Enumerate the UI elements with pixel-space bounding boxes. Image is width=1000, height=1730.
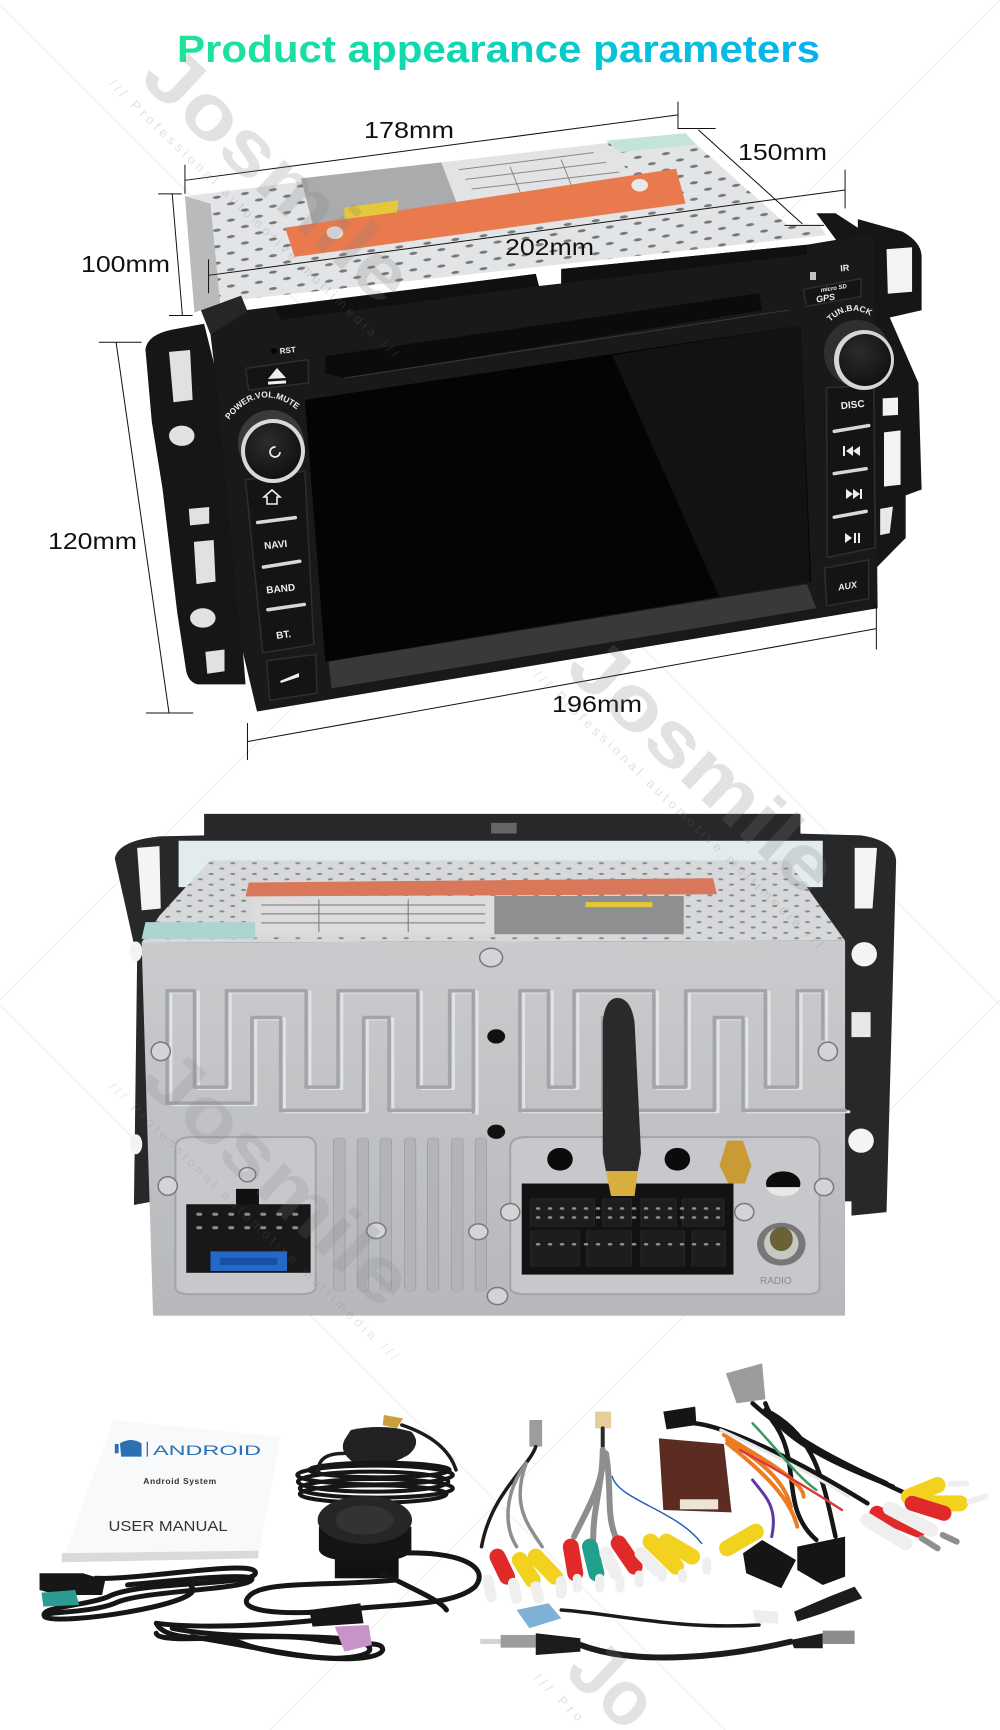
front panel labels: BT. bbox=[275, 629, 292, 642]
GPS gold connector bbox=[719, 1141, 751, 1184]
front panel labels: micro SD bbox=[820, 284, 848, 294]
left knob bbox=[238, 410, 305, 483]
watermark 2: Josmile bbox=[551, 619, 856, 912]
dimension: 150mm: 150mm bbox=[738, 139, 827, 165]
RCA plugs right bbox=[867, 1483, 985, 1548]
front panel labels: IR bbox=[840, 263, 850, 273]
watermark 1: Josmile bbox=[126, 28, 431, 321]
dimension: 202mm bbox=[209, 170, 845, 293]
front panel labels: TUN.BACK bbox=[826, 305, 873, 320]
dimension: 178mm: 178mm bbox=[364, 117, 454, 143]
pink connector bbox=[309, 1603, 372, 1652]
GPS antenna bbox=[297, 1415, 456, 1503]
manual text bbox=[108, 1442, 261, 1535]
RCA harness left bbox=[482, 1412, 756, 1598]
dimension: 120mm bbox=[48, 342, 193, 713]
holes bbox=[487, 1029, 800, 1196]
dimension: 100mm bbox=[81, 194, 193, 316]
control buttons bbox=[246, 279, 875, 700]
manual text: Android System bbox=[143, 1476, 217, 1486]
teal connector bbox=[40, 1573, 105, 1607]
front panel labels: NAVI bbox=[264, 539, 288, 552]
dimension: 196mm bbox=[247, 605, 876, 760]
chassis top plate bbox=[185, 133, 826, 313]
watermark 2: /// Professional automotive multimedia /// bbox=[531, 667, 827, 952]
WiFi antenna bbox=[603, 998, 641, 1196]
rear chassis top bbox=[142, 841, 845, 942]
product: rear view bbox=[115, 814, 896, 1316]
round socket bbox=[757, 1223, 806, 1266]
lower panels bbox=[175, 1137, 820, 1294]
manual text: USER MANUAL bbox=[108, 1518, 228, 1535]
watermark 3: /// Professional automotive multimedia /// bbox=[106, 1079, 402, 1364]
front panel labels: RST bbox=[279, 345, 296, 356]
dimension: 120mm: 120mm bbox=[48, 528, 137, 554]
rear plate bbox=[142, 941, 845, 1316]
front panel labels: POWER.VOL.MUTE bbox=[224, 392, 300, 420]
front face bbox=[201, 234, 878, 712]
dimension: 150mm bbox=[698, 130, 827, 225]
CAN decoder box bbox=[659, 1438, 732, 1512]
microphone speaker bbox=[318, 1496, 412, 1578]
touch screen bbox=[305, 326, 816, 688]
dimension: 100mm: 100mm bbox=[81, 251, 170, 277]
manual text: ANDROID bbox=[153, 1442, 261, 1458]
female connectors bbox=[743, 1537, 845, 1588]
accessories bbox=[40, 1363, 985, 1659]
mounting bracket bbox=[145, 213, 922, 684]
dimension: 178mm bbox=[185, 102, 716, 194]
dimension: 202mm: 202mm bbox=[505, 234, 594, 260]
rear mounting bracket bbox=[115, 814, 896, 1216]
watermark 1: /// Professional automotive multimedia /// bbox=[106, 76, 402, 361]
watermark 3: Josmile bbox=[126, 1031, 431, 1324]
front panel labels: GPS bbox=[815, 292, 836, 304]
disc slot bbox=[325, 293, 762, 378]
rear label: RADIO: RADIO bbox=[760, 1276, 792, 1287]
front panel labels: AUX bbox=[836, 579, 859, 593]
right connector block bbox=[522, 1184, 733, 1275]
product: front view bbox=[145, 133, 922, 712]
serpentine heat sink grooves bbox=[167, 991, 849, 1114]
front panel icons bbox=[264, 272, 862, 683]
title: Product appearance parameters bbox=[177, 29, 820, 71]
watermark 4: /// Pro bbox=[531, 1670, 586, 1724]
vent slots bbox=[334, 1138, 487, 1291]
dimension: 196mm: 196mm bbox=[552, 691, 642, 717]
front panel labels: DISC bbox=[840, 399, 865, 412]
screws bbox=[151, 948, 837, 1305]
left power connector bbox=[186, 1189, 311, 1273]
user manual booklet bbox=[62, 1420, 281, 1562]
main wire harness bbox=[663, 1363, 906, 1540]
black cable loops bbox=[44, 1553, 479, 1659]
front panel labels bbox=[223, 222, 873, 682]
right knob bbox=[824, 320, 894, 390]
aux and radio adapter cables bbox=[480, 1587, 862, 1657]
front panel labels: BAND bbox=[266, 583, 296, 596]
